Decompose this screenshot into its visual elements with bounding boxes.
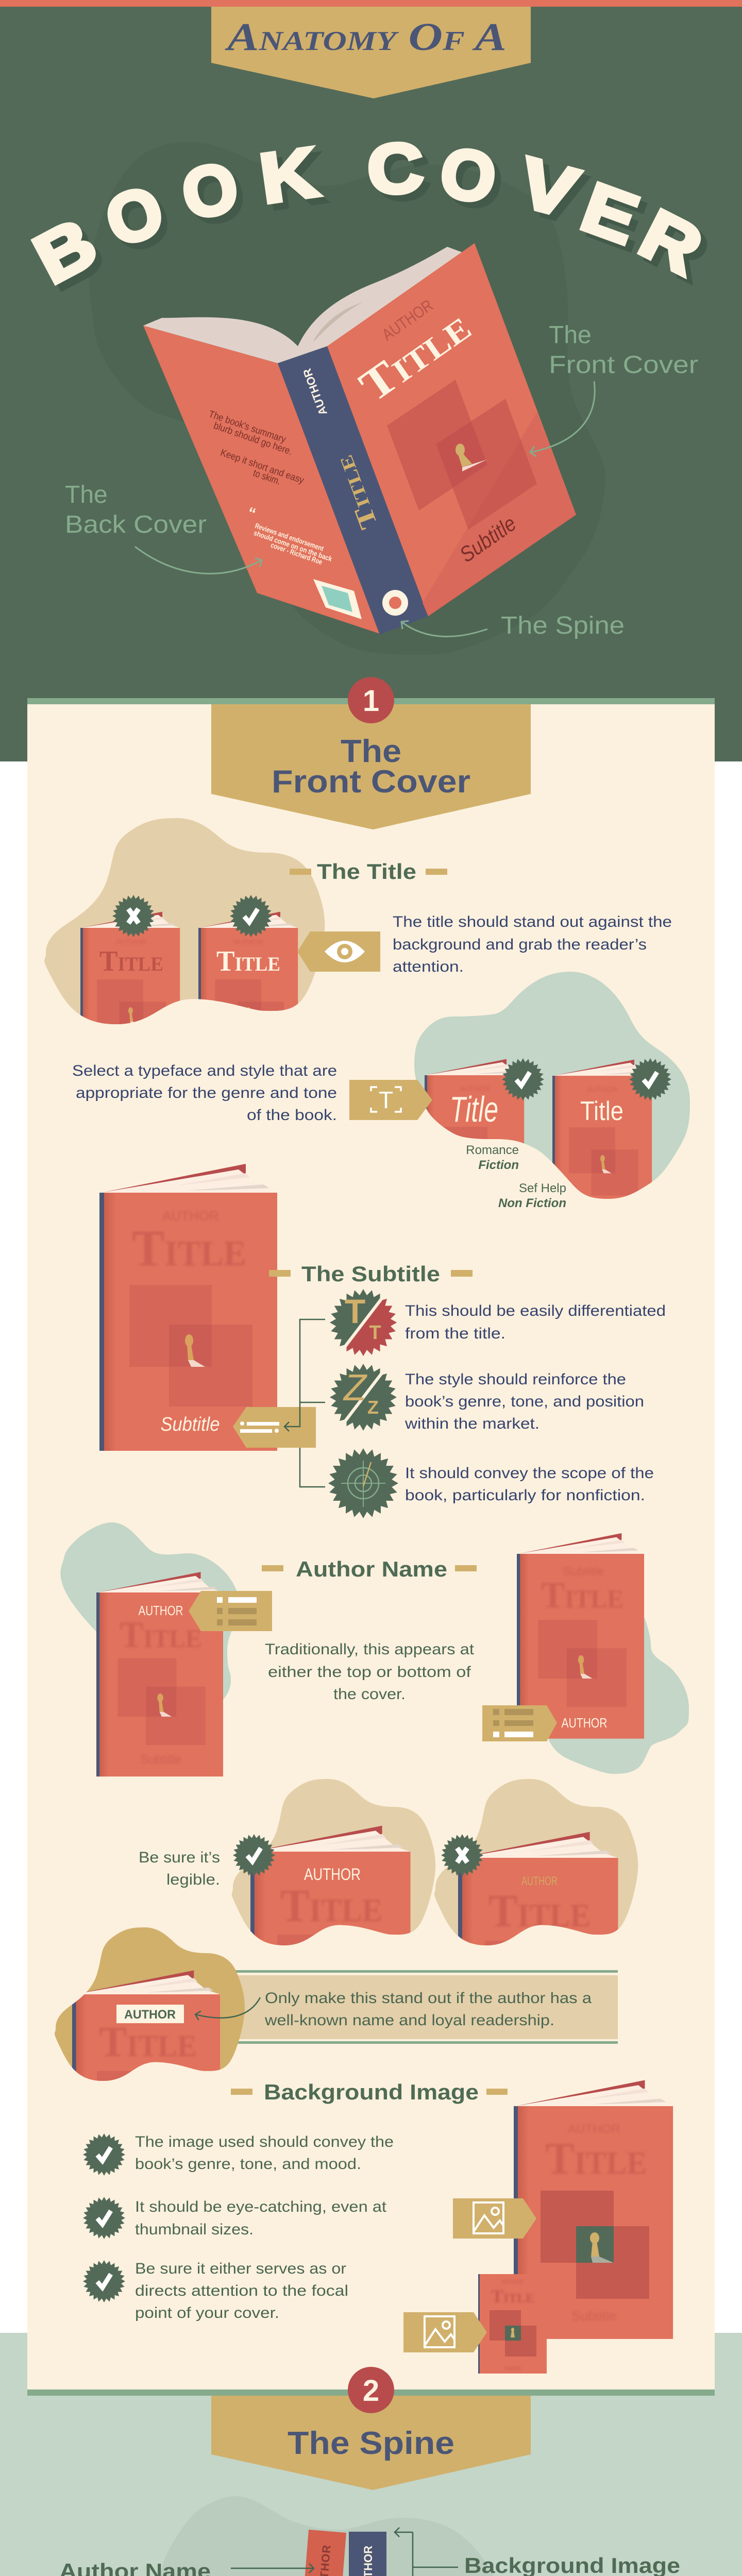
front cover: AUTHOR xyxy=(378,296,436,344)
text: image tips: Be sure it either serves as or xyxy=(135,2260,346,2277)
label: back cover: Back Cover xyxy=(65,511,207,538)
title: book cover shadow: O xyxy=(182,154,250,240)
blob: author left xyxy=(60,1522,239,1701)
text: typeface xyxy=(72,1062,337,1124)
book: illegible author: AUTHOR xyxy=(521,1874,558,1888)
icon: size contrast badge: T xyxy=(345,1292,365,1330)
text: typeface: Select a typeface and style that are xyxy=(72,1062,337,1079)
text: title contrast: background and grab the reader’s xyxy=(393,936,647,953)
title: book cover: O xyxy=(96,170,173,261)
number badge 2 xyxy=(348,2367,394,2413)
front cover: Subtitle xyxy=(455,511,520,567)
divider bar xyxy=(27,2389,715,2396)
icon: check 3 xyxy=(83,2260,125,2302)
book: low contrast title: AUTHOR xyxy=(116,938,147,946)
heading: the subtitle: The Subtitle xyxy=(301,1262,440,1286)
title banner: Anatomy Of A xyxy=(225,15,507,59)
icon: scope target badge xyxy=(328,1448,398,1518)
text: title contrast xyxy=(393,913,672,975)
book: standout author: Title xyxy=(99,2018,197,2066)
book: high contrast title: Title xyxy=(216,945,280,977)
icon: keyhole xyxy=(456,444,487,471)
book: subtitle: Title xyxy=(132,1219,246,1277)
back cover: Keep it short and easy xyxy=(219,447,306,486)
panel: the spine xyxy=(0,2333,742,2576)
heading: background image: Background Image xyxy=(264,2080,479,2104)
spine: Title xyxy=(329,452,383,533)
label: author box: AUTHOR xyxy=(124,2008,176,2022)
text: image tips: thumbnail sizes. xyxy=(135,2221,254,2238)
blob: typeface xyxy=(414,972,690,1199)
title: book cover: B xyxy=(22,202,109,299)
book: low contrast title xyxy=(80,912,180,1024)
heading: the title xyxy=(290,859,447,884)
divider bar xyxy=(27,698,715,704)
label: self help non fiction xyxy=(498,1181,566,1210)
hero background blob xyxy=(89,142,605,655)
text: typeface: of the book. xyxy=(247,1107,337,1124)
book: author at bottom xyxy=(517,1533,644,1739)
blob: author standout xyxy=(55,1927,245,2081)
back cover: “ xyxy=(245,504,258,523)
front cover: Title xyxy=(351,301,480,412)
title: book cover shadow: E xyxy=(578,174,654,265)
icon: subtitle tag xyxy=(233,1407,316,1448)
title: book cover: O xyxy=(176,147,244,234)
heading: author name xyxy=(262,1557,477,1581)
title: book cover: O xyxy=(436,132,501,218)
title: book cover shadow: O xyxy=(442,139,507,224)
text: author placement: either the top or bottom of xyxy=(268,1664,471,1681)
callout: author standout xyxy=(227,1970,618,2044)
back cover: Reviews and endorsement xyxy=(254,521,325,553)
icon: top list tag xyxy=(189,1591,272,1631)
label: self help non fiction: Sef Help xyxy=(519,1181,566,1195)
text: subtitle tips: It should convey the scope of the xyxy=(405,1465,654,1482)
icon: correct badge xyxy=(233,1834,275,1876)
blob: spines xyxy=(159,2496,528,2576)
text: image tips: The image used should convey the xyxy=(135,2133,394,2150)
book: self help non fiction: AUTHOR xyxy=(587,1085,618,1093)
section banner: The Spine xyxy=(288,2426,454,2461)
blob: author right xyxy=(549,1571,689,1774)
label: the spine: The Spine xyxy=(501,612,625,639)
label: back cover xyxy=(65,481,262,573)
book: romance fiction: AUTHOR xyxy=(459,1084,490,1093)
book: high contrast title: AUTHOR xyxy=(233,938,264,946)
book: author at top: AUTHOR xyxy=(138,1603,183,1618)
top accent bar xyxy=(0,0,742,7)
icon: correct badge xyxy=(230,895,272,937)
book: subtitle: Subtitle xyxy=(161,1414,220,1435)
label: author box xyxy=(116,2005,184,2023)
text: subtitle tips: book’s genre, tone, and position xyxy=(405,1393,644,1410)
text: subtitle tips xyxy=(404,1302,666,1504)
text: author placement: Traditionally, this appears at xyxy=(265,1641,475,1658)
number badge 1: 1 xyxy=(363,684,379,718)
label: front cover: Front Cover xyxy=(549,351,698,379)
text: image tips xyxy=(135,2133,394,2321)
label: back cover: The xyxy=(65,481,108,509)
book: thumbnail background image xyxy=(478,2274,547,2374)
icon: eye tag xyxy=(297,931,380,972)
text: author placement: the cover. xyxy=(333,1686,406,1703)
blob: legible bad xyxy=(434,1779,638,1945)
text: subtitle tips: from the title. xyxy=(405,1325,505,1342)
icon: bottom list tag xyxy=(482,1705,557,1741)
text: subtitle tips: book, particularly for nonfiction. xyxy=(405,1487,645,1504)
book: self help non fiction: Title xyxy=(580,1096,623,1126)
section banner xyxy=(211,704,531,829)
icon: barcode xyxy=(313,579,362,619)
open book illustration xyxy=(143,243,576,635)
arrow xyxy=(195,1997,260,2018)
book: romance fiction: Title xyxy=(450,1089,498,1129)
icon: wrong badge xyxy=(441,1834,483,1876)
text: image tips: book’s genre, tone, and mood. xyxy=(135,2156,361,2173)
label: romance fiction: Romance xyxy=(466,1143,519,1157)
back cover: cover - Richard Roe xyxy=(269,541,324,566)
label: romance fiction: Fiction xyxy=(478,1158,519,1172)
book: author at bottom: Title xyxy=(541,1574,623,1616)
text: legible: Be sure it’s xyxy=(139,1849,220,1866)
text: author placement xyxy=(265,1641,475,1703)
text: image tips: directs attention to the focal xyxy=(135,2282,348,2299)
label: front cover xyxy=(530,321,698,452)
icon: correct badge xyxy=(502,1058,544,1100)
blob: title xyxy=(44,818,325,1024)
text: title contrast: attention. xyxy=(393,958,464,975)
text: title contrast: The title should stand out against the xyxy=(393,913,672,930)
label: front cover: The xyxy=(549,321,592,349)
text: legible xyxy=(139,1849,220,1888)
title: book cover shadow: R xyxy=(634,200,720,296)
title: book cover shadow: O xyxy=(103,176,179,267)
book: thumbnail background image: Subtitle xyxy=(504,2366,521,2371)
label: background image xyxy=(395,2532,713,2576)
callout: author standout: Only make this stand out if the author has a xyxy=(265,1990,592,2007)
book: large background image: AUTHOR xyxy=(568,2122,620,2136)
icon: check 2 xyxy=(83,2197,125,2239)
title: book cover shadow: K xyxy=(261,139,328,224)
icon: wrong badge xyxy=(112,895,155,937)
title: book cover: K xyxy=(255,132,322,218)
book: standout author xyxy=(72,1970,220,2081)
text: typeface: appropriate for the genre and tone xyxy=(76,1084,337,1101)
book: large background image: Title xyxy=(545,2134,647,2184)
front cover xyxy=(327,243,576,616)
label: romance fiction xyxy=(466,1143,519,1172)
book: author at top: Title xyxy=(120,1614,202,1655)
connector lines xyxy=(284,1319,325,1487)
back cover: blurb should go here. xyxy=(212,420,294,457)
spine xyxy=(278,346,428,635)
icon: style contrast badge: Z xyxy=(367,1397,379,1418)
title: book cover: E xyxy=(572,167,648,259)
panel: the front cover xyxy=(27,677,715,2396)
text: subtitle tips: within the market. xyxy=(404,1415,539,1432)
book: high contrast title xyxy=(198,912,298,1011)
section banner: Front Cover xyxy=(272,764,470,800)
heading: author name: Author Name xyxy=(296,1557,447,1581)
book: author at bottom: Subtitle xyxy=(563,1565,604,1579)
book: author at top xyxy=(96,1572,223,1776)
text: subtitle tips: The style should reinforce the xyxy=(405,1371,626,1388)
heading: the title: The Title xyxy=(317,859,416,884)
back cover: should come on on the back xyxy=(252,529,333,563)
book: legible author: AUTHOR xyxy=(304,1865,361,1884)
book: low contrast title: Title xyxy=(99,945,163,977)
book: illegible author: Title xyxy=(488,1886,591,1937)
section banner: The xyxy=(341,734,401,769)
text: image tips: It should be eye-catching, even at xyxy=(135,2198,387,2215)
book: legible author xyxy=(250,1826,410,1945)
blob: legible good xyxy=(232,1779,435,1945)
text: legible: legible. xyxy=(166,1871,220,1888)
book spine: good design xyxy=(349,2532,386,2576)
number badge 2: 2 xyxy=(363,2374,379,2408)
text: image tips: point of your cover. xyxy=(135,2304,279,2321)
book: romance fiction xyxy=(425,1059,525,1144)
icon: size contrast badge xyxy=(330,1289,397,1356)
book: large background image xyxy=(514,2080,673,2339)
icon: image tag small xyxy=(403,2312,487,2352)
callout: author standout: well-known name and loyal readership. xyxy=(264,2012,554,2029)
book: author at top: Subtitle xyxy=(140,1753,181,1767)
label: self help non fiction: Non Fiction xyxy=(498,1196,566,1210)
icon: image tag xyxy=(453,2198,536,2239)
title: book cover shadow: C xyxy=(372,135,431,215)
book: illegible author xyxy=(458,1832,618,1945)
title banner xyxy=(211,7,531,98)
book: self help non fiction xyxy=(552,1059,652,1199)
icon: style contrast badge: Z xyxy=(343,1367,367,1409)
hero: header area xyxy=(0,0,742,761)
section banner xyxy=(211,2396,531,2490)
pages xyxy=(143,247,463,363)
book: subtitle: AUTHOR xyxy=(162,1208,219,1224)
title: book cover shadow xyxy=(28,135,720,305)
icon: type tag: T xyxy=(379,1087,393,1113)
icon: correct badge xyxy=(629,1058,671,1100)
book: legible author: Title xyxy=(280,1880,382,1931)
back cover xyxy=(143,326,380,634)
title: book cover shadow: B xyxy=(28,209,115,305)
title: book cover: C xyxy=(365,129,425,209)
book: subtitle xyxy=(99,1164,277,1451)
book: thumbnail background image: AUTHOR xyxy=(502,2279,524,2285)
label: the spine xyxy=(401,612,625,639)
title: book cover: R xyxy=(628,194,714,290)
icon: style contrast badge xyxy=(330,1364,397,1431)
heading: the subtitle xyxy=(269,1262,473,1286)
book: thumbnail background image: Title xyxy=(491,2286,534,2307)
text: subtitle tips: This should be easily differentiated xyxy=(405,1302,666,1319)
title: book cover: V xyxy=(511,142,585,232)
book: large background image: Subtitle xyxy=(572,2308,616,2324)
book: author at bottom: AUTHOR xyxy=(562,1715,607,1731)
icon: size contrast badge: T xyxy=(369,1322,381,1344)
back cover: The book's summary xyxy=(207,409,288,445)
number badge 1 xyxy=(348,677,394,723)
title: book cover shadow: V xyxy=(517,148,592,239)
back cover: to skim. xyxy=(251,468,282,487)
icon: check 1 xyxy=(83,2133,125,2176)
title: book cover xyxy=(22,129,714,299)
icon: type tag xyxy=(349,1080,432,1120)
spine: AUTHOR xyxy=(300,367,330,417)
book spine: poor design xyxy=(286,2530,346,2576)
